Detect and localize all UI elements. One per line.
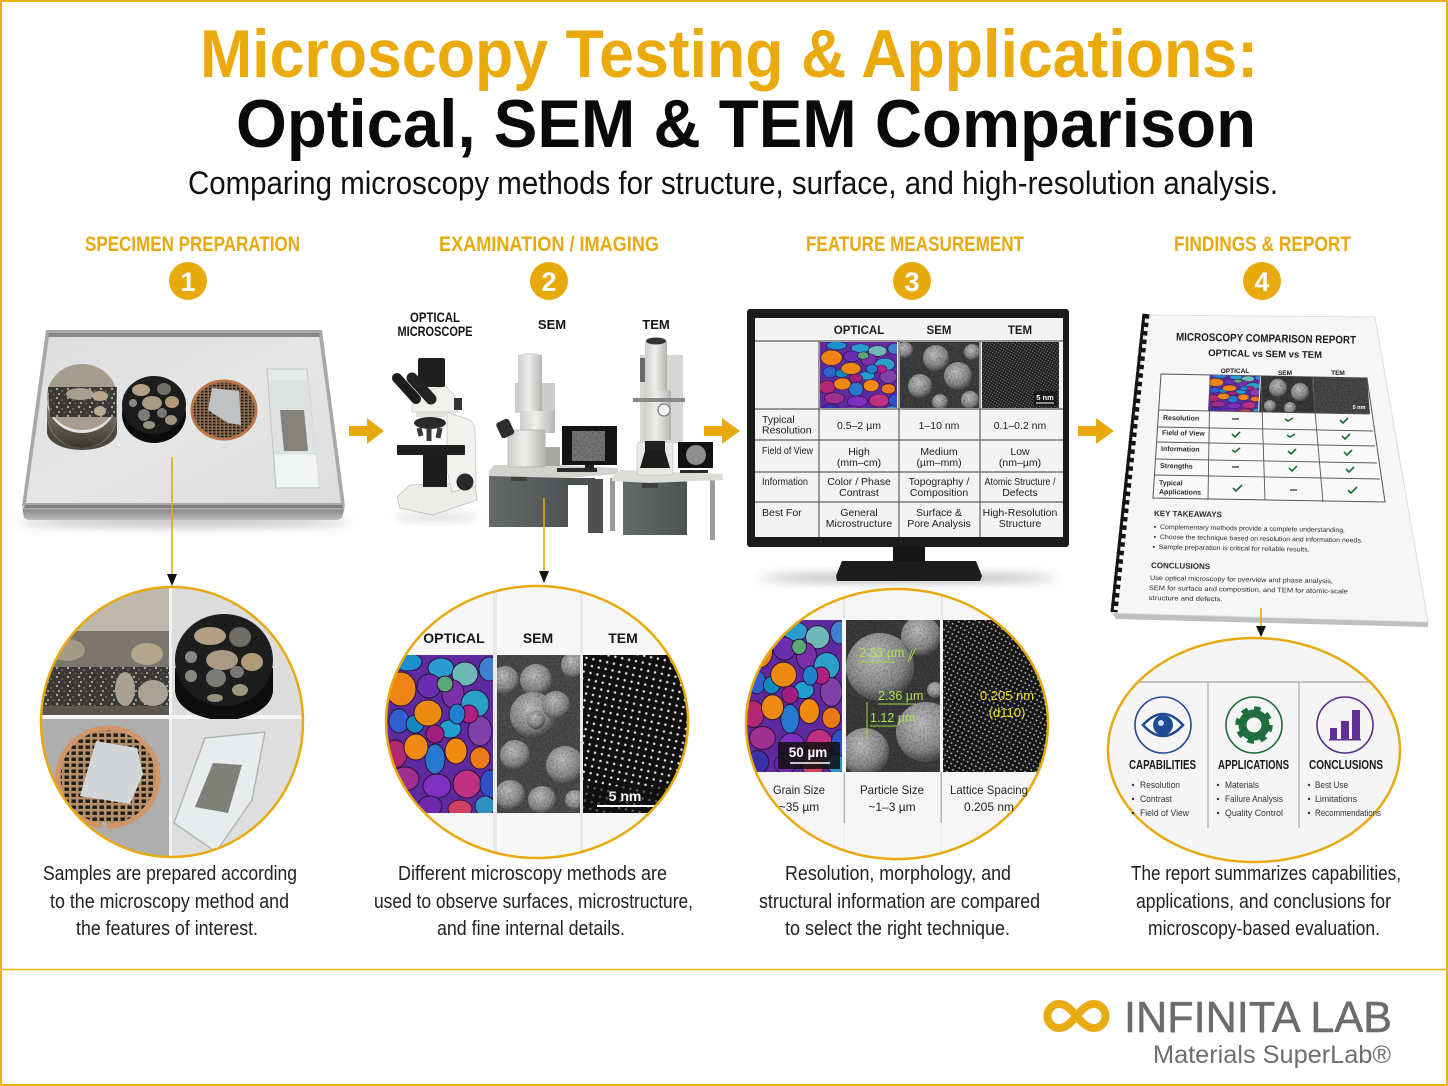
capabilities: eye icon and list: Contrast	[1140, 794, 1172, 805]
caption step 1	[43, 863, 297, 940]
table text: (nm–µm)	[999, 457, 1041, 469]
step 3 heading	[806, 232, 1024, 300]
measurement captions: Grain Size	[773, 783, 825, 797]
detail circle: report summary	[1106, 636, 1402, 864]
table text	[762, 325, 1058, 530]
SEM particle image with dimensions: 2.36 µm	[878, 689, 923, 703]
report table: Field of View	[1162, 430, 1205, 438]
conclusions: Use optical microscopy for overview and phase analysis,	[1150, 575, 1333, 585]
instrument labels: SEM	[538, 317, 566, 332]
report document	[1112, 314, 1428, 627]
step 4 heading: 4	[1254, 267, 1270, 297]
applications: gear icon and list: APPLICATIONS	[1218, 758, 1289, 772]
instrument labels: TEM	[642, 317, 670, 332]
step 1 heading: SPECIMEN PREPARATION	[85, 232, 300, 256]
logo	[1048, 993, 1392, 1069]
instrument labels: MICROSCOPE	[398, 323, 472, 339]
step 3 heading: FEATURE MEASUREMENT	[806, 232, 1024, 256]
report table: Information	[1161, 446, 1200, 454]
caption step 4	[1131, 863, 1401, 940]
sample: polished cross-section cylinder	[47, 364, 117, 450]
quadrant: copper grid	[40, 719, 169, 859]
caption step 4: The report summarizes capabilities,	[1131, 863, 1401, 885]
caption step 3: Resolution, morphology, and	[785, 863, 1011, 885]
arrow: report to summary	[1256, 608, 1266, 637]
caption step 2: and fine internal details.	[437, 918, 625, 940]
table text: 0.1–0.2 nm	[994, 420, 1047, 432]
icon: infinity	[1048, 1004, 1106, 1028]
table text: Topography /	[909, 476, 969, 488]
table text: Defects	[1002, 487, 1038, 499]
SEM micrograph	[497, 655, 580, 813]
optical micrograph	[387, 655, 493, 813]
report title: OPTICAL vs SEM vs TEM	[1208, 348, 1322, 361]
SEM particle image with dimensions	[846, 620, 940, 772]
key takeaways	[1153, 509, 1363, 555]
quadrant: cross-section	[40, 586, 169, 715]
table text: Pore Analysis	[907, 518, 971, 530]
table text: Field of View	[762, 445, 813, 457]
table text: Color / Phase	[827, 476, 891, 488]
table text: Resolution	[762, 424, 812, 436]
column labels: SEM	[523, 630, 553, 646]
report title: SEM	[1278, 370, 1292, 377]
TEM micrograph: 5 nm	[609, 788, 641, 804]
arrow: step 1 to detail	[167, 457, 177, 586]
title: Microscopy Testing & Applications:	[200, 16, 1258, 92]
quadrant: glass slide	[172, 719, 305, 859]
caption step 1: the features of interest.	[76, 918, 258, 940]
instrument labels	[398, 309, 670, 339]
caption step 2	[374, 863, 693, 940]
caption step 4: applications, and conclusions for	[1136, 891, 1391, 913]
applications: gear icon and list: Quality Control	[1225, 808, 1283, 819]
measurement captions: ~35 µm	[779, 800, 819, 814]
measurement captions: Particle Size	[860, 783, 924, 797]
key takeaways: Complementary methods provide a complete understanding.	[1160, 524, 1345, 534]
table text: 1–10 nm	[919, 420, 960, 432]
table text: SEM	[927, 325, 951, 337]
report table: 5 nm	[1353, 405, 1366, 411]
caption step 2: used to observe surfaces, microstructure,	[374, 891, 693, 913]
TEM lattice image with spacing: 0.205 nm	[980, 688, 1034, 703]
table grid	[755, 341, 1063, 537]
table text: High-Resolution	[983, 507, 1058, 519]
table text: (µm–mm)	[916, 457, 962, 469]
conclusions: SEM for surface and composition, and TEM for atomic-scale	[1149, 585, 1348, 595]
table text: Contrast	[839, 487, 879, 499]
applications: gear icon and list	[1217, 697, 1289, 819]
measurement captions: Lattice Spacing	[950, 783, 1028, 797]
capabilities: eye icon and list	[1129, 697, 1196, 819]
report table: Strengths	[1160, 463, 1193, 471]
instrument labels: OPTICAL	[410, 309, 460, 325]
table text: Composition	[910, 487, 968, 499]
table text: OPTICAL	[834, 325, 884, 337]
step 4 heading	[1174, 232, 1351, 300]
step 1 heading	[85, 232, 300, 300]
arrow: instruments to images	[539, 498, 549, 583]
capabilities: eye icon and list: Field of View	[1140, 808, 1189, 819]
table thumbnails	[820, 342, 1059, 408]
report table	[1153, 374, 1385, 502]
arrow: step 3 to 4	[1078, 418, 1114, 444]
TEM lattice image with spacing	[943, 620, 1049, 772]
conclusions	[1149, 561, 1348, 605]
wordmark: INFINITA LAB	[1124, 993, 1392, 1042]
caption step 1: to the microscopy method and	[50, 891, 289, 913]
arrow: step 1 to 2	[349, 418, 384, 444]
subtitle: Comparing microscopy methods for structure, surface, and high-resolution analysis.	[188, 165, 1278, 201]
conclusions: structure and defects.	[1149, 595, 1223, 603]
caption step 1: Samples are prepared according	[43, 863, 297, 885]
step 2 heading: 2	[541, 267, 557, 297]
column labels	[424, 634, 637, 643]
table text: High	[848, 446, 870, 458]
table text: Low	[1010, 446, 1030, 458]
TEM instrument	[612, 338, 723, 540]
report table: Applications	[1159, 489, 1201, 497]
table text: Medium	[920, 446, 958, 458]
step 3 heading: 3	[904, 267, 920, 297]
column labels: OPTICAL	[423, 630, 485, 646]
key takeaways: Choose the technique based on resolution and information needs.	[1160, 534, 1363, 545]
SEM particle image with dimensions: 1.12 µm	[870, 711, 915, 725]
spiral binding	[1112, 314, 1146, 612]
TEM lattice image with spacing: (d110)	[989, 705, 1025, 720]
conclusions: bar chart icon and list: Limitations	[1315, 794, 1357, 805]
table text: Structure	[999, 518, 1041, 530]
conclusions: bar chart icon and list: Best Use	[1315, 780, 1348, 791]
monitor with comparison table	[747, 309, 1069, 582]
SEM instrument	[489, 353, 618, 533]
detail circle: specimen types	[40, 586, 305, 859]
sample: copper TEM grid	[192, 381, 256, 439]
footer divider	[0, 968, 1448, 970]
TEM micrograph	[583, 655, 689, 813]
step 1 heading: 1	[180, 267, 196, 297]
table text: Atomic Structure /	[984, 476, 1056, 488]
report title	[1176, 331, 1356, 377]
specimen tray with samples	[19, 330, 349, 527]
table text: Best For	[762, 507, 802, 519]
report table: Typical	[1159, 480, 1183, 487]
optical grain image with scale bar: 50 µm	[789, 745, 827, 760]
step 4 heading: FINDINGS & REPORT	[1174, 232, 1351, 256]
conclusions: bar chart icon and list: Recommendations	[1315, 808, 1381, 819]
report title: TEM	[1331, 370, 1345, 377]
measurement captions	[773, 783, 1028, 814]
table text: Microstructure	[826, 518, 892, 530]
table text: TEM	[1008, 325, 1032, 337]
capabilities: eye icon and list: CAPABILITIES	[1129, 758, 1196, 772]
arrow: step 2 to 3	[704, 418, 740, 444]
caption step 3: structural information are compared	[759, 891, 1040, 913]
table text: General	[840, 507, 878, 519]
report title: MICROSCOPY COMPARISON REPORT	[1176, 331, 1356, 347]
caption step 2: Different microscopy methods are	[398, 863, 667, 885]
column labels: TEM	[608, 630, 638, 646]
measurement captions: 0.205 nm	[964, 800, 1014, 814]
caption step 3: to select the right technique.	[785, 918, 1010, 940]
applications: gear icon and list: Failure Analysis	[1225, 794, 1283, 805]
SEM particle image with dimensions: 2.33 µm	[859, 646, 904, 660]
detail circle: optical, SEM, TEM images	[383, 585, 689, 859]
detail circle: measurements	[742, 588, 1049, 860]
optical grain image with scale bar	[747, 620, 842, 772]
conclusions: CONCLUSIONS	[1151, 561, 1211, 571]
title: Optical, SEM & TEM Comparison	[236, 86, 1256, 162]
caption step 3	[759, 863, 1040, 940]
table text: (mm–cm)	[837, 457, 881, 469]
report table: Resolution	[1163, 415, 1199, 423]
sample: resin mount disc	[122, 376, 186, 443]
optical microscope	[396, 358, 477, 520]
quadrant: resin mount	[172, 586, 305, 720]
conclusions: bar chart icon and list: CONCLUSIONS	[1309, 758, 1383, 772]
sample: glass slide	[267, 369, 319, 488]
step 2 heading	[439, 232, 659, 300]
title	[200, 16, 1258, 162]
key takeaways: Sample preparation is critical for reliable results.	[1159, 544, 1310, 554]
table text: Information	[762, 476, 808, 488]
step 2 heading: EXAMINATION / IMAGING	[439, 232, 659, 256]
table thumbnails: 5 nm	[1036, 393, 1054, 402]
conclusions: bar chart icon and list	[1308, 697, 1383, 819]
measurement captions: ~1–3 µm	[868, 800, 916, 814]
key takeaways: KEY TAKEAWAYS	[1154, 509, 1223, 519]
tagline: Materials SuperLab®	[1153, 1041, 1392, 1069]
table text: Surface &	[916, 507, 962, 519]
caption step 4: microscopy-based evaluation.	[1148, 918, 1380, 940]
table text: 0.5–2 µm	[837, 420, 881, 432]
applications: gear icon and list: Materials	[1225, 780, 1259, 791]
report title: OPTICAL	[1221, 368, 1249, 375]
table text: Typical	[762, 414, 795, 426]
capabilities: eye icon and list: Resolution	[1140, 780, 1180, 791]
